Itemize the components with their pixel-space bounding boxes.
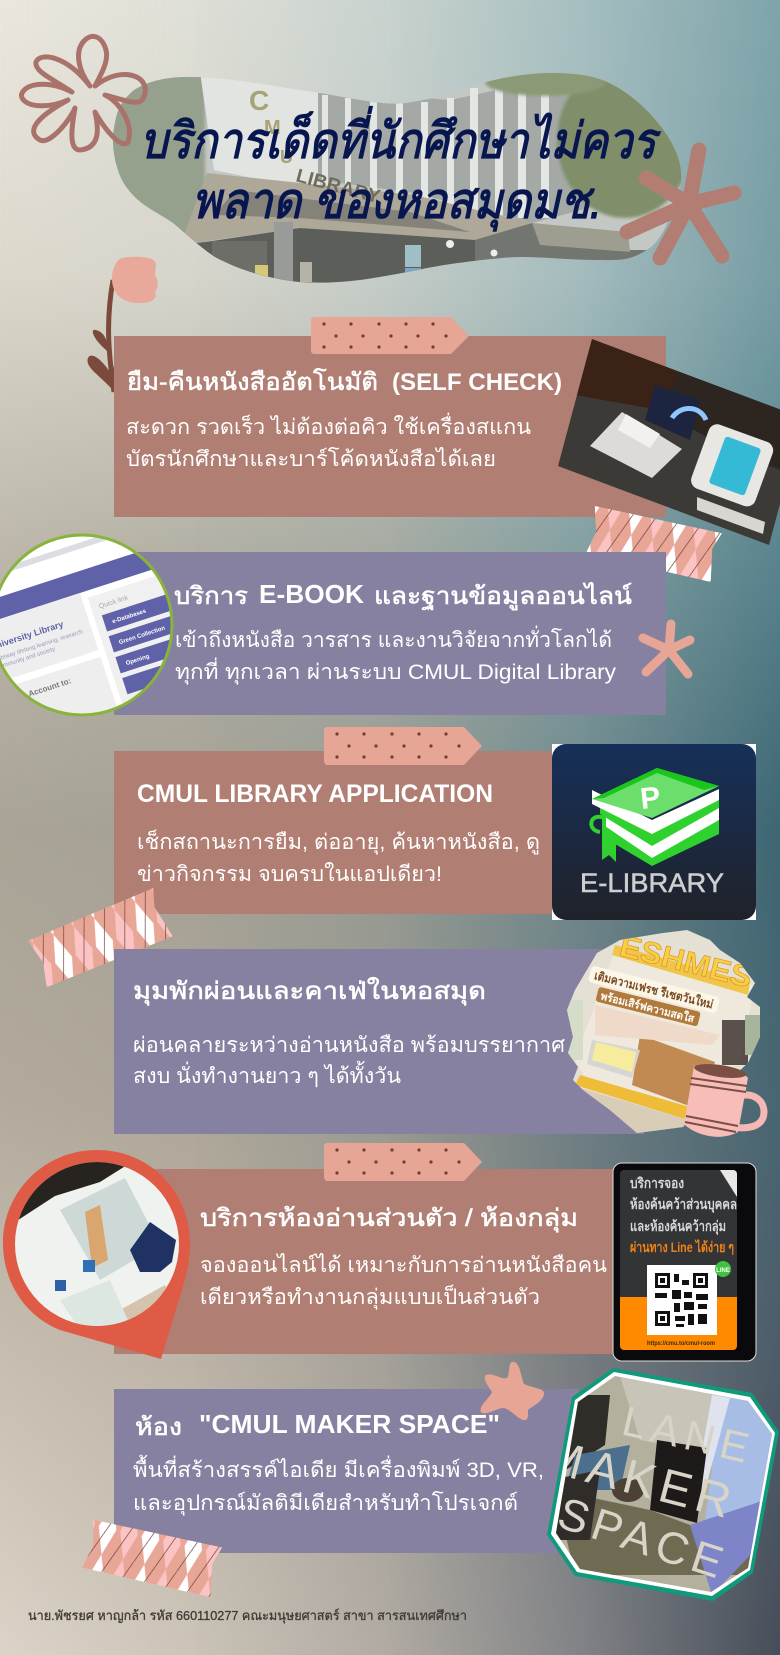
body text: เดียวหรือทำงานกลุ่มแบบเป็นส่วนตัว [200, 1283, 540, 1310]
tablet caption: และห้องค้นคว้ากลุ่ม [630, 1218, 726, 1235]
body text: ทุกที่ ทุกเวลา ผ่านระบบ CMUL Digital Library [175, 657, 617, 685]
photo: website screenshot circle: Green Collection [118, 625, 166, 646]
URL caption: https://cmu.to/cmul-room [647, 1340, 715, 1347]
sign: LIBRARY: LIBRARY [294, 166, 383, 208]
icon: outline flower [22, 36, 145, 150]
body text [133, 1034, 566, 1088]
photo: tablet with QR [613, 1163, 756, 1361]
sign: CMU letters [250, 90, 292, 163]
tape 1 [584, 504, 722, 582]
body text: บัตรนักศึกษาและบาร์โค้ดหนังสือได้เลย [126, 447, 496, 471]
heading: e-book: บริการ [174, 583, 248, 610]
banner: เติมความเฟรช รีเซตวันใหม่ [593, 968, 715, 1012]
body text: พื้นที่สร้างสรรค์ไอเดีย มีเครื่องพิมพ์ 3D, VR, [133, 1455, 544, 1482]
body text [133, 1455, 544, 1516]
P mark: P [639, 781, 662, 816]
panel 6: maker space [114, 1389, 579, 1553]
tablet caption: บริการจอง [630, 1175, 684, 1191]
panel 4: cafe [114, 949, 644, 1134]
LINE badge [715, 1261, 731, 1277]
body text: ข่าวกิจกรรม จบครบในแอปเดียว! [137, 862, 442, 886]
body text [175, 625, 617, 685]
photo: website screenshot circle: Account to: [27, 676, 72, 699]
panel 1: self check [114, 336, 666, 517]
sign: CMU letters: M [264, 117, 281, 139]
logo wordmark: E-LIBRARY [580, 868, 724, 898]
body text: ผ่อนคลายระหว่างอ่านหนังสือ พร้อมบรรยากาศ [133, 1034, 566, 1057]
photo: website screenshot circle: e-Databases [112, 608, 148, 625]
tab 1 [311, 317, 469, 354]
body text [137, 828, 540, 886]
sign: CMU letters: C [249, 85, 269, 116]
sign: CMU letters: U [280, 147, 293, 167]
LINE badge: LINE [716, 1268, 730, 1274]
tab 2 [324, 727, 482, 765]
heading: maker space: ห้อง [135, 1414, 182, 1441]
body text: สงบ นั่งทำงานยาว ๆ ได้ทั้งวัน [133, 1061, 401, 1088]
heading: e-book: E-BOOK [259, 579, 364, 609]
icon: tulip [87, 257, 158, 392]
heading: e-book: และฐานข้อมูลออนไลน์ [374, 582, 632, 611]
photo: self check kiosk [550, 330, 780, 550]
photo wall lettering: LANE [618, 1397, 753, 1472]
photo wall lettering: MAKER [537, 1429, 736, 1529]
photo wall lettering [559, 1406, 748, 1578]
icon: asterisk flower [627, 150, 734, 258]
body text [126, 412, 531, 471]
panel 3: library application [114, 751, 554, 914]
body text: เข้าถึงหนังสือ วารสาร และงานวิจัยจากทั่วโลกได้ [175, 625, 612, 652]
photo: website screenshot circle: Quick link [98, 594, 130, 611]
heading: self check: ยืม-คืนหนังสืออัตโนมัติ [127, 368, 378, 396]
shop sign: ESHMES [616, 930, 755, 994]
footer credit: นาย.พัชรยศ หาญกล้า รหัส 660110277 คณะมนุษยศาสตร์ สาขา สารสนเทศศึกษา [28, 1608, 467, 1624]
icon: coffee mug [684, 1061, 764, 1137]
panel 2: e-book [114, 552, 666, 715]
heading: maker space: "CMUL MAKER SPACE" [199, 1409, 500, 1439]
photo: website screenshot circle [0, 534, 174, 716]
tablet caption: ผ่านทาง Line ได้ง่าย ๆ [630, 1238, 734, 1255]
heading: e-book [174, 579, 632, 611]
tab 3 [324, 1143, 482, 1181]
canopy [180, 173, 532, 245]
icon: pink star [481, 1362, 544, 1420]
heading: self check [127, 368, 562, 396]
banner: พร้อมเสิร์ฟความสดใส [599, 989, 696, 1025]
body text: สะดวก รวดเร็ว ไม่ต้องต่อคิว ใช้เครื่องสแกน [126, 412, 531, 439]
tablet caption [630, 1175, 737, 1255]
title photo blob: library building [112, 72, 682, 283]
body text: และอุปกรณ์มัลติมีเดียสำหรับทำโปรเจกต์ [133, 1491, 518, 1516]
heading: rooms: บริการห้องอ่านส่วนตัว / ห้องกลุ่ม [200, 1205, 578, 1233]
body text: จองออนไลน์ได้ เหมาะกับการอ่านหนังสือคน [200, 1253, 607, 1277]
photo: map pin with reading room [3, 1150, 190, 1359]
photo: maker space octagon [537, 1368, 780, 1605]
title: line 1 and 2: พลาด ของหอสมุดมช. [192, 173, 602, 232]
title: line 1 and 2: บริการเด็ดที่นักศึกษาไม่ควร [140, 106, 660, 169]
tape 2 [27, 888, 173, 987]
QR code [647, 1265, 717, 1335]
tablet caption: ห้องค้นคว้าส่วนบุคคล [630, 1196, 737, 1213]
tape 3 [82, 1518, 222, 1597]
panel 5: reading rooms [114, 1169, 619, 1354]
photo wall lettering: SPACE [552, 1487, 729, 1588]
body text: เช็กสถานะการยืม, ต่ออายุ, ค้นหาหนังสือ, ดู [137, 828, 540, 855]
heading: application: CMUL LIBRARY APPLICATION [137, 780, 493, 808]
icon: e-library app logo [552, 744, 756, 920]
photo: website screenshot circle: Opening [125, 654, 151, 667]
photo: cafe shop [567, 930, 760, 1133]
body text [200, 1253, 607, 1310]
heading: self check: (SELF CHECK) [392, 369, 562, 396]
title: line 1 and 2 [140, 106, 660, 232]
icon: small pink asterisk [643, 624, 690, 674]
heading: cafe: มุมพักผ่อนและคาเฟ่ในหอสมุด [133, 977, 486, 1006]
